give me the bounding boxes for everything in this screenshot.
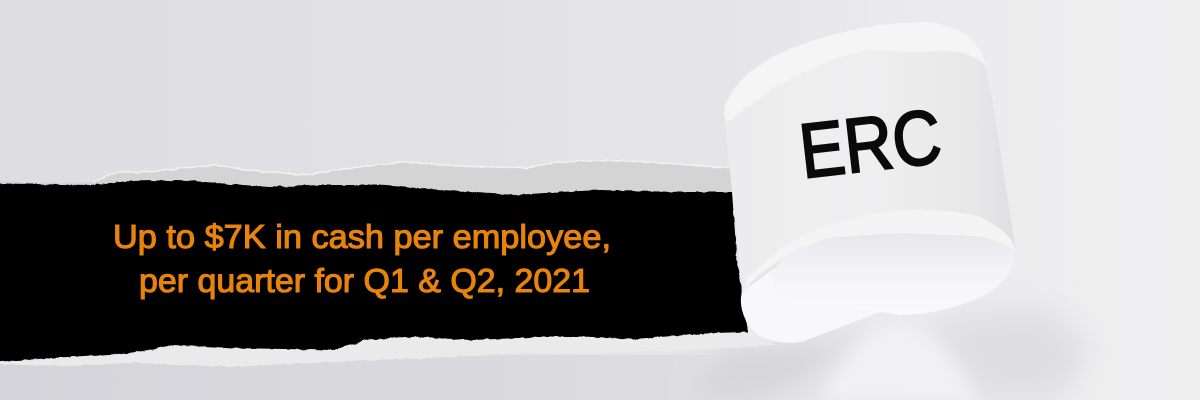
roll inner flap [741,250,880,343]
roll outer surface [724,22,1015,293]
roll inner surface [772,225,1015,315]
roll label: ERC [795,94,945,195]
roll bottom torn band [745,210,1015,290]
shadow under roll [690,305,1090,400]
lower paper shading [0,355,1200,400]
paper roll [724,22,1015,343]
black opening in the paper [0,180,748,363]
orange headline: per quarter for Q1 & Q2, 2021 [139,263,590,300]
lower torn paper edge [0,327,775,367]
orange headline [113,219,611,300]
roll top torn band [724,22,986,122]
orange headline: Up to $7K in cash per employee, [113,219,611,256]
upper torn paper edge [0,160,735,200]
